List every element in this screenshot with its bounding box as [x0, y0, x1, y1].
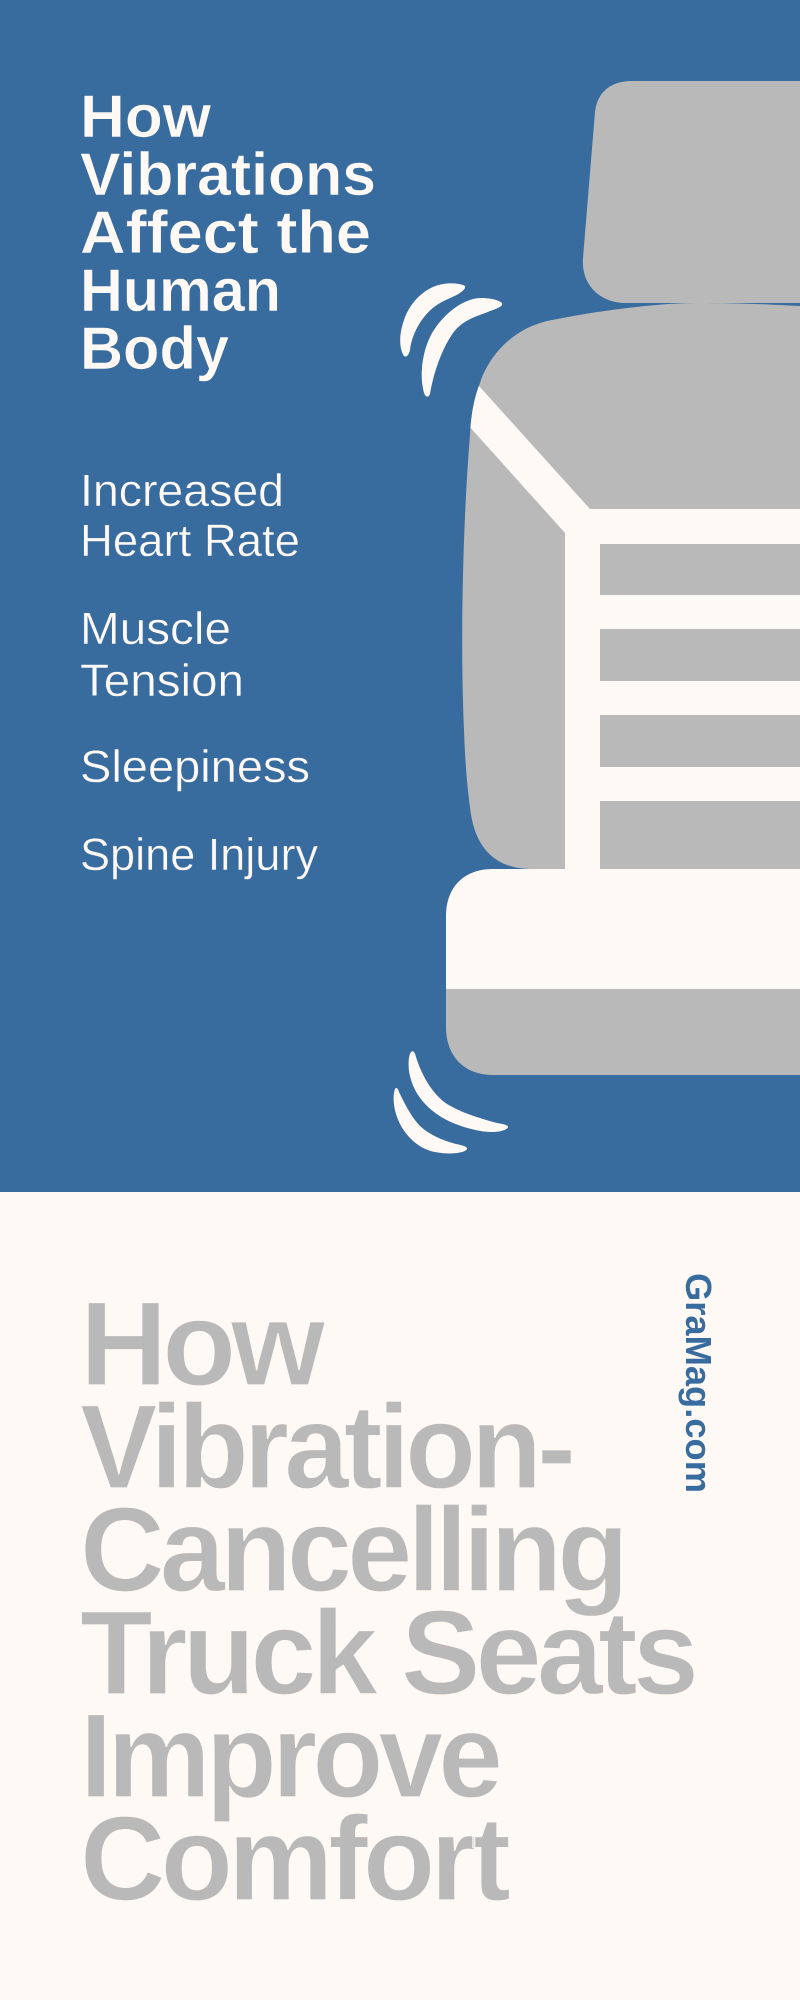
panel heading: How Vibrations Affect the Human Body: How — [80, 83, 211, 150]
panel heading: How Vibrations Affect the Human Body — [80, 83, 376, 382]
backrest cream straps — [460, 376, 800, 869]
panel heading: How Vibrations Affect the Human Body: Affect the — [80, 199, 371, 266]
effect: muscle tension: Tension — [80, 655, 244, 706]
main title: How Vibration-Cancelling Truck Seats Improve Comfort — [80, 1277, 694, 1926]
effect: muscle tension — [80, 603, 244, 706]
effect: increased heart rate — [80, 465, 300, 566]
panel heading: How Vibrations Affect the Human Body: Human — [80, 257, 281, 324]
panel heading: How Vibrations Affect the Human Body: Vibrations — [80, 141, 376, 208]
main title: How Vibration-Cancelling Truck Seats Improve Comfort: Improve — [80, 1689, 499, 1823]
icon: vibration marks, top — [400, 283, 502, 397]
main title: How Vibration-Cancelling Truck Seats Improve Comfort: Truck Seats — [80, 1586, 694, 1720]
effect: increased heart rate: Increased — [80, 465, 284, 516]
top blue panel — [0, 0, 800, 1192]
brand: GraMag.com: GraMag.com — [678, 1273, 719, 1493]
main title: How Vibration-Cancelling Truck Seats Improve Comfort: How — [80, 1277, 326, 1411]
icon: vibration marks, bottom — [394, 1051, 508, 1153]
effect: muscle tension: Muscle — [80, 603, 231, 654]
effect: sleepiness: Sleepiness — [80, 741, 310, 792]
panel heading: How Vibrations Affect the Human Body: Body — [80, 315, 230, 382]
list of vibration effects — [80, 465, 318, 880]
icon: truck seat — [446, 81, 800, 1075]
backrest grey ribs — [600, 544, 800, 869]
main title: How Vibration-Cancelling Truck Seats Improve Comfort: Cancelling — [80, 1483, 624, 1617]
seat backrest — [462, 303, 800, 869]
main title: How Vibration-Cancelling Truck Seats Improve Comfort: Comfort — [80, 1792, 510, 1926]
effect: increased heart rate: Heart Rate — [80, 515, 300, 566]
seat headrest — [583, 81, 800, 303]
bottom cream panel — [0, 1192, 800, 2000]
effect: spine injury: Spine Injury — [80, 829, 318, 880]
seat cushion — [446, 869, 800, 1075]
main title: How Vibration-Cancelling Truck Seats Improve Comfort: Vibration- — [80, 1380, 572, 1514]
